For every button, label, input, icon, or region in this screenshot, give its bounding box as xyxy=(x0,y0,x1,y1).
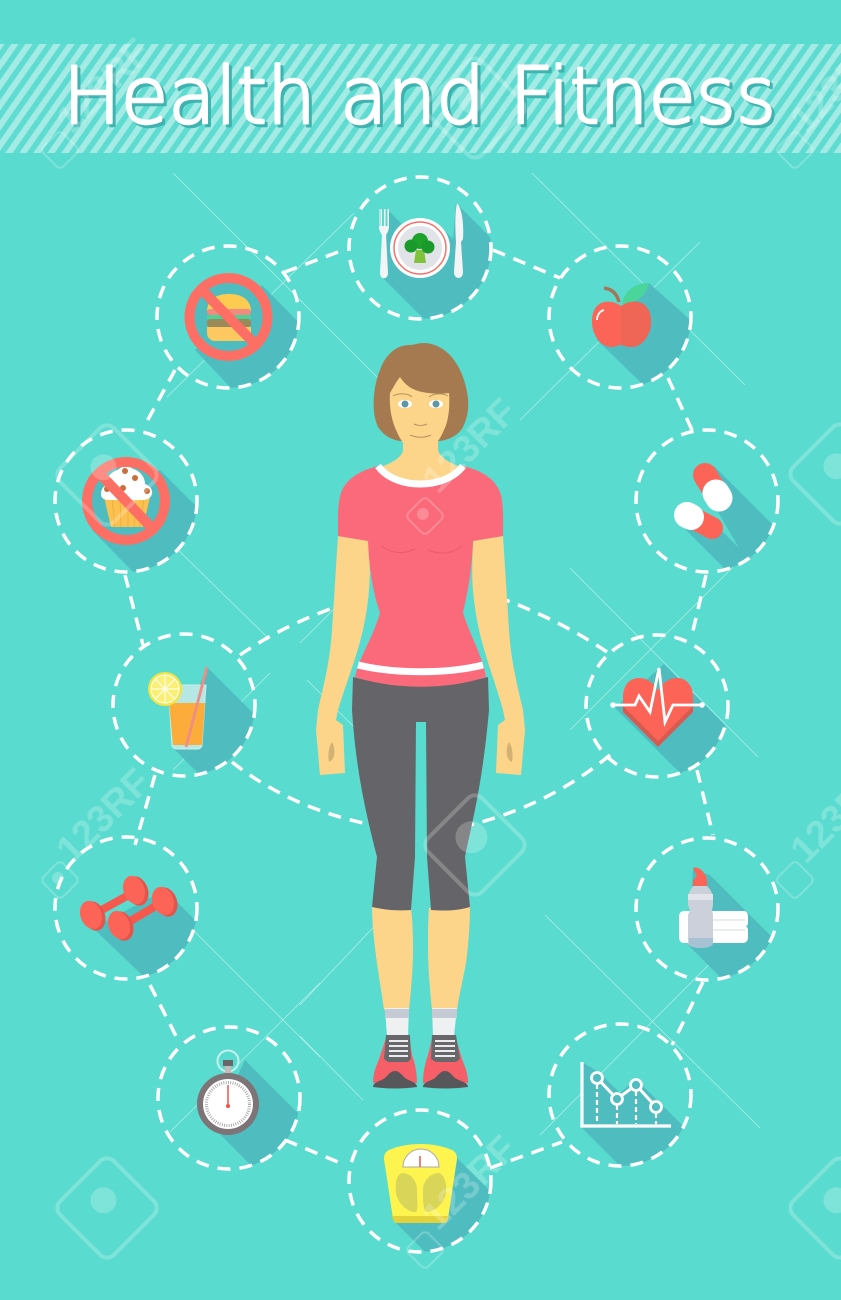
face xyxy=(390,377,449,452)
woman figure xyxy=(316,343,525,1088)
leggings xyxy=(352,677,489,911)
shoes xyxy=(373,1035,468,1088)
icon: no burger xyxy=(155,244,301,390)
thin diagonal lines xyxy=(167,173,760,1135)
icon: water bottle and towel xyxy=(634,836,780,982)
legs xyxy=(372,905,470,1010)
watermark text: 123RF xyxy=(49,761,159,871)
dashed connectors xyxy=(125,250,713,1168)
icon: apple xyxy=(547,244,693,390)
banner xyxy=(0,44,841,153)
hair xyxy=(374,343,468,441)
hand shading xyxy=(328,742,513,762)
arms xyxy=(316,536,525,775)
t-shirt xyxy=(338,466,503,687)
neck xyxy=(378,435,463,495)
socks xyxy=(385,1008,457,1036)
title: Health and Fitness xyxy=(63,52,776,142)
collar xyxy=(378,466,463,484)
icon: stopwatch xyxy=(156,1025,302,1171)
watermark text: 123RF xyxy=(415,391,525,501)
shirt hem band xyxy=(358,665,483,672)
title: Health and Fitness xyxy=(66,55,779,145)
brows, nose and mouth xyxy=(393,394,448,437)
icon: heart with pulse xyxy=(584,633,730,779)
watermark text: 123RF xyxy=(415,1128,525,1238)
watermark text: 123RF xyxy=(49,31,159,141)
icon: no cupcake xyxy=(53,428,199,574)
icon: plate with broccoli xyxy=(347,175,493,321)
eyes xyxy=(398,400,443,408)
icon: dumbbells xyxy=(53,835,199,981)
icon: line chart xyxy=(547,1022,693,1168)
icon: pills xyxy=(634,428,780,574)
icon: juice glass xyxy=(111,632,257,778)
icon: bathroom scale xyxy=(347,1108,493,1254)
shirt folds xyxy=(382,546,462,553)
